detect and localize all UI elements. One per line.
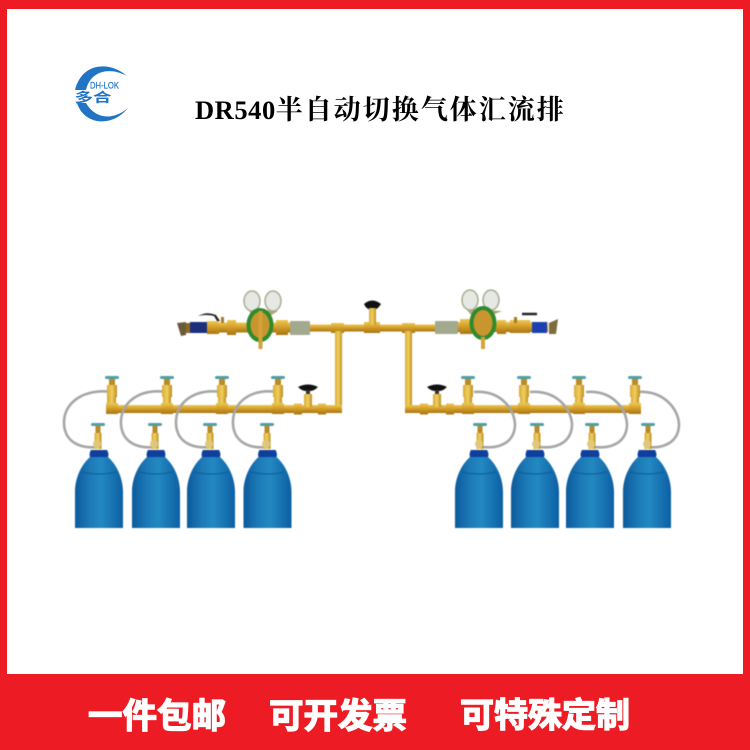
top pipe assembly (290, 300, 458, 407)
left coupling (290, 321, 310, 335)
hoses (64, 391, 679, 447)
cylinder 8 (623, 450, 671, 528)
right regulator (458, 290, 558, 349)
title: DR540半自动切换气体汇流排 (195, 95, 566, 125)
right coupling (435, 321, 458, 334)
cylinder 5 (455, 450, 503, 528)
right manifold pipe (405, 392, 639, 414)
pipe: top horizontal right (375, 324, 435, 332)
left manifold pipe (107, 392, 342, 414)
cylinder 7 (566, 450, 614, 528)
icon: centre hand valve (364, 300, 381, 325)
logo: DH-LOK: 多合 (74, 86, 111, 106)
logo: DH-LOK: DH-LOK (90, 80, 120, 92)
cylinder 2 (132, 450, 180, 528)
pipe: right riser (405, 331, 412, 407)
cylinder 6 (511, 450, 559, 528)
cylinder 1 (75, 450, 123, 528)
cylinder valves (91, 423, 655, 449)
upper valves right (461, 376, 642, 414)
icon: left hand valve (298, 384, 318, 407)
upper valves left (105, 376, 285, 414)
banner text: free shipping: 一件包邮 (88, 688, 226, 738)
pipe: left riser (335, 331, 342, 407)
icon: right hand valve (427, 384, 447, 407)
pipe: top horizontal left (310, 324, 375, 332)
left regulator (177, 291, 290, 349)
cylinder 4 (244, 450, 292, 528)
banner text: customisation: 可特殊定制 (460, 688, 630, 737)
bottom red banner (0, 674, 750, 750)
banner text: invoice: 可开发票 (269, 688, 407, 738)
cylinder 3 (187, 450, 235, 528)
